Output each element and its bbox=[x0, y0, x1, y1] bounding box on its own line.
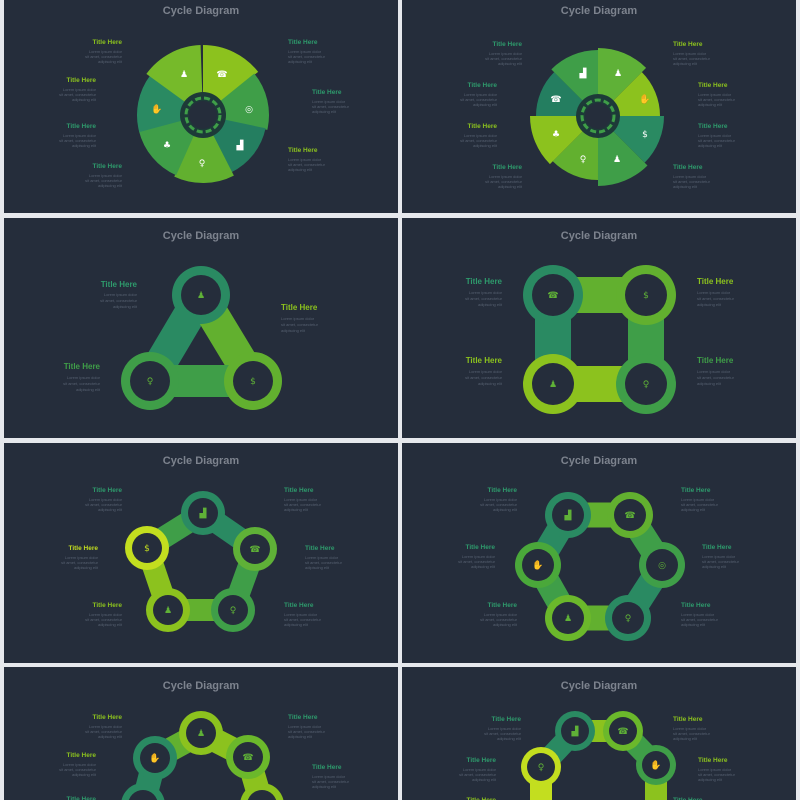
slide 1 labels: Lorem ipsum dolor bbox=[288, 49, 322, 54]
slide 2 labels: Title Here bbox=[673, 164, 703, 171]
slide 3 labels: Title Here bbox=[101, 280, 138, 289]
slide 8 labels: sit amet, consectetur bbox=[673, 731, 711, 736]
slide 3 triangle cycle bbox=[121, 266, 282, 410]
slide 1 heading: Cycle Diagram bbox=[163, 5, 239, 17]
slide 5 labels: sit amet, consectetur bbox=[305, 560, 343, 565]
slide 7 seven-node cycle (partial): ✋ bbox=[149, 752, 161, 764]
slide 4 labels: adipiscing elit bbox=[478, 302, 503, 307]
slide 5 labels: adipiscing elit bbox=[98, 507, 123, 512]
slide 5 labels: Lorem ipsum dolor bbox=[89, 497, 123, 502]
slide 5 heading: Cycle Diagram bbox=[163, 455, 239, 467]
slide 3 labels: Lorem ipsum dolor bbox=[67, 375, 101, 380]
slide 2 labels: Title Here bbox=[467, 123, 497, 130]
slide 8 labels: Title Here bbox=[491, 716, 521, 723]
slide 4 labels: Title Here bbox=[466, 356, 503, 365]
slide 4 four-node cycle: $ bbox=[643, 291, 649, 301]
slide 6 labels: Lorem ipsum dolor bbox=[462, 554, 496, 559]
slide 7 labels: Lorem ipsum dolor bbox=[63, 762, 97, 767]
slide 7 labels: adipiscing elit bbox=[312, 784, 337, 789]
slide 5 labels: adipiscing elit bbox=[98, 622, 123, 627]
slide 1 labels: adipiscing elit bbox=[288, 167, 313, 172]
slide 3 labels: sit amet, consectetur bbox=[100, 298, 138, 303]
slide 8 labels: Lorem ipsum dolor bbox=[463, 767, 497, 772]
slide 2 labels: Title Here bbox=[673, 41, 703, 48]
slide 6 labels: sit amet, consectetur bbox=[458, 559, 496, 564]
slide 1 labels: adipiscing elit bbox=[72, 97, 97, 102]
slide 6 hexagon cycle: ☎ bbox=[624, 511, 636, 521]
slide 4 four-node cycle: ♟ bbox=[549, 380, 557, 390]
slide 2 labels: sit amet, consectetur bbox=[698, 138, 736, 143]
slide 5 labels: Title Here bbox=[305, 545, 335, 552]
slide 4 labels bbox=[465, 277, 735, 386]
slide 7 labels: adipiscing elit bbox=[288, 734, 313, 739]
slide 7 labels: Title Here bbox=[66, 752, 96, 759]
slide 1 pie chart: ☎ bbox=[216, 70, 228, 80]
slide 5 background bbox=[4, 443, 398, 663]
slide 4 labels: Lorem ipsum dolor bbox=[697, 290, 731, 295]
slide 2 background bbox=[402, 0, 796, 213]
slide 7 labels: Title Here bbox=[92, 714, 122, 721]
slide 3 labels: adipiscing elit bbox=[281, 328, 306, 333]
slide 2 labels: sit amet, consectetur bbox=[485, 56, 523, 61]
slide 5 labels: Title Here bbox=[284, 602, 314, 609]
slide 6 labels: sit amet, consectetur bbox=[702, 559, 740, 564]
slide 2 pie chart: ☎ bbox=[550, 95, 562, 105]
slide 7 labels: Lorem ipsum dolor bbox=[312, 774, 346, 779]
slide 5 pentagon cycle bbox=[125, 491, 277, 632]
slide 3 labels: Lorem ipsum dolor bbox=[281, 316, 315, 321]
slide 8 labels: Lorem ipsum dolor bbox=[488, 726, 522, 731]
slide 5 labels: sit amet, consectetur bbox=[61, 560, 99, 565]
slide 1 labels: Lorem ipsum dolor bbox=[63, 87, 97, 92]
slide 5 labels bbox=[61, 487, 343, 627]
slide 1 labels: adipiscing elit bbox=[312, 109, 337, 114]
slide 4 labels: sit amet, consectetur bbox=[465, 296, 503, 301]
slide 2 labels: Title Here bbox=[467, 82, 497, 89]
slide 6 labels: adipiscing elit bbox=[681, 507, 706, 512]
slide 6 labels: sit amet, consectetur bbox=[681, 617, 719, 622]
slide 2 labels: sit amet, consectetur bbox=[673, 56, 711, 61]
slide 6 labels: Title Here bbox=[487, 487, 517, 494]
slide 4 labels: Title Here bbox=[697, 277, 734, 286]
slide 6 labels: Title Here bbox=[487, 602, 517, 609]
slide 8 labels: adipiscing elit bbox=[698, 777, 723, 782]
slide 2 labels: Lorem ipsum dolor bbox=[673, 51, 707, 56]
slide 5 labels: Title Here bbox=[284, 487, 314, 494]
slide 2 pie chart: ♀ bbox=[580, 155, 586, 165]
slide 5 labels: sit amet, consectetur bbox=[284, 617, 322, 622]
slide 6 background bbox=[402, 443, 796, 663]
slide 4 labels: sit amet, consectetur bbox=[697, 375, 735, 380]
slide 5 labels: Lorem ipsum dolor bbox=[89, 612, 123, 617]
slide 3 labels: Title Here bbox=[64, 362, 101, 371]
slide 2 labels: adipiscing elit bbox=[473, 102, 498, 107]
slide 6 labels: sit amet, consectetur bbox=[681, 502, 719, 507]
slide 2 labels: Title Here bbox=[492, 41, 522, 48]
slide 7 labels: sit amet, consectetur bbox=[85, 729, 123, 734]
slide 5 labels: Title Here bbox=[92, 487, 122, 494]
slide 3 triangle cycle: ♟ bbox=[197, 291, 205, 301]
slide 2 heading: Cycle Diagram bbox=[561, 5, 637, 17]
slide 7 labels: sit amet, consectetur bbox=[312, 779, 350, 784]
slide 7 labels: adipiscing elit bbox=[72, 772, 97, 777]
slide 8 heading: Cycle Diagram bbox=[561, 680, 637, 692]
slide 8 labels: sit amet, consectetur bbox=[484, 731, 522, 736]
slide 2 labels: Lorem ipsum dolor bbox=[698, 133, 732, 138]
slide 2 labels: Lorem ipsum dolor bbox=[698, 92, 732, 97]
slide 6 hexagon cycle: ◎ bbox=[658, 561, 666, 571]
slide 1 labels: Title Here bbox=[66, 77, 96, 84]
slide 3 triangle cycle: ♀ bbox=[147, 377, 153, 387]
slide 2 labels: Title Here bbox=[698, 82, 728, 89]
slide 6 hexagon cycle: ♟ bbox=[564, 614, 572, 624]
slide 1 labels: Lorem ipsum dolor bbox=[89, 49, 123, 54]
slide 6 labels: Lorem ipsum dolor bbox=[702, 554, 736, 559]
slide 1 labels: adipiscing elit bbox=[288, 59, 313, 64]
slide 5 pentagon cycle: ▟ bbox=[199, 507, 208, 519]
slide 4 heading: Cycle Diagram bbox=[561, 230, 637, 242]
slide 5 labels: adipiscing elit bbox=[305, 565, 330, 570]
slide 1 labels: sit amet, consectetur bbox=[59, 138, 97, 143]
slide 8 labels: Title Here bbox=[673, 716, 703, 723]
slide 7 labels: sit amet, consectetur bbox=[59, 767, 97, 772]
slide 2 pie chart: ♟ bbox=[614, 69, 622, 79]
slide 4 background bbox=[402, 218, 796, 438]
slide 3 labels: Title Here bbox=[281, 303, 318, 312]
slide 7 heading: Cycle Diagram bbox=[163, 680, 239, 692]
slide 8 labels bbox=[459, 716, 736, 800]
slide 1 labels: sit amet, consectetur bbox=[59, 92, 97, 97]
slide 7 seven-node cycle (partial): ☎ bbox=[242, 753, 254, 763]
slide 7 labels bbox=[59, 714, 350, 800]
slide 1 labels: Title Here bbox=[92, 163, 122, 170]
slide 5 labels: adipiscing elit bbox=[74, 565, 99, 570]
slide 5 labels: Title Here bbox=[92, 602, 122, 609]
slide 5 labels: Lorem ipsum dolor bbox=[284, 497, 318, 502]
slide 2 labels: sit amet, consectetur bbox=[460, 97, 498, 102]
slide 4 labels: Lorem ipsum dolor bbox=[469, 369, 503, 374]
slide 2 labels: adipiscing elit bbox=[498, 61, 523, 66]
slide 1 pie chart: ♣ bbox=[163, 141, 171, 151]
slide 1 labels: sit amet, consectetur bbox=[85, 54, 123, 59]
slide 1 pie chart: ♟ bbox=[180, 70, 188, 80]
slide 2 labels bbox=[460, 41, 736, 189]
slide 7 labels: Title Here bbox=[312, 764, 342, 771]
slide 5 labels: Lorem ipsum dolor bbox=[305, 555, 339, 560]
slide 1 labels: Title Here bbox=[288, 147, 318, 154]
slide 1 labels: sit amet, consectetur bbox=[85, 178, 123, 183]
slide 8 labels: adipiscing elit bbox=[497, 736, 522, 741]
slide 3 labels: adipiscing elit bbox=[113, 304, 138, 309]
slide 1 labels: Title Here bbox=[288, 39, 318, 46]
slide 5 labels: sit amet, consectetur bbox=[85, 617, 123, 622]
slide 6 heading: Cycle Diagram bbox=[561, 455, 637, 467]
slide 1 labels: Title Here bbox=[92, 39, 122, 46]
slide 4 labels: Title Here bbox=[697, 356, 734, 365]
slide 5 pentagon cycle: $ bbox=[144, 544, 150, 554]
slide 6 labels: Lorem ipsum dolor bbox=[484, 612, 518, 617]
slide 3 triangle cycle: $ bbox=[250, 377, 256, 387]
slide 4 labels: Title Here bbox=[466, 277, 503, 286]
slide 8 labels: adipiscing elit bbox=[673, 736, 698, 741]
slide 2 pie chart: ♣ bbox=[552, 130, 560, 140]
slide 2 labels: sit amet, consectetur bbox=[673, 179, 711, 184]
slide 7 labels: Title Here bbox=[288, 714, 318, 721]
slide 2 labels: Lorem ipsum dolor bbox=[489, 174, 523, 179]
slide 2 labels: adipiscing elit bbox=[473, 143, 498, 148]
slide 6 labels: adipiscing elit bbox=[702, 564, 727, 569]
slide 5 pentagon cycle: ♀ bbox=[230, 606, 236, 616]
slide 8 eight-node cycle (partial): ♀ bbox=[538, 763, 544, 773]
slide 8 labels: Lorem ipsum dolor bbox=[673, 726, 707, 731]
slide 1 labels: Lorem ipsum dolor bbox=[63, 133, 97, 138]
slide 1 pie chart bbox=[151, 66, 253, 169]
slide 8 eight-node cycle (partial): ✋ bbox=[650, 759, 662, 771]
slide 1 labels: adipiscing elit bbox=[98, 183, 123, 188]
slide 6 labels: Title Here bbox=[681, 602, 711, 609]
slide 8 labels: sit amet, consectetur bbox=[459, 772, 497, 777]
slide 5 labels: Lorem ipsum dolor bbox=[65, 555, 99, 560]
slide 2 labels: Lorem ipsum dolor bbox=[464, 133, 498, 138]
slide 1 labels: Title Here bbox=[66, 123, 96, 130]
slide 4 four-node cycle: ☎ bbox=[547, 291, 559, 301]
slide 4 four-node cycle bbox=[523, 265, 676, 414]
slide 5 labels: adipiscing elit bbox=[284, 507, 309, 512]
slide 7 labels: Lorem ipsum dolor bbox=[89, 724, 123, 729]
slide 6 hexagon cycle: ♀ bbox=[625, 614, 631, 624]
slide 6 labels: Lorem ipsum dolor bbox=[681, 612, 715, 617]
slide 6 labels: adipiscing elit bbox=[493, 507, 518, 512]
slide 1 pie chart: ◎ bbox=[245, 105, 253, 115]
slide 1 labels: sit amet, consectetur bbox=[312, 104, 350, 109]
slide 3 labels bbox=[63, 280, 319, 392]
slide 8 labels: Title Here bbox=[466, 757, 496, 764]
slide 6 labels: Lorem ipsum dolor bbox=[484, 497, 518, 502]
slide 2 pie chart: $ bbox=[642, 130, 648, 140]
slide 5 labels: sit amet, consectetur bbox=[85, 502, 123, 507]
slide 8 labels: adipiscing elit bbox=[472, 777, 497, 782]
slide 7 labels: adipiscing elit bbox=[98, 734, 123, 739]
slide 1 pie chart: ✋ bbox=[151, 103, 163, 115]
slide 1 pie chart: ▟ bbox=[236, 139, 245, 151]
slide 2 labels: sit amet, consectetur bbox=[485, 179, 523, 184]
slide 5 pentagon cycle: ☎ bbox=[249, 545, 261, 555]
slide 8 labels: Title Here bbox=[698, 757, 728, 764]
slide 8 eight-node cycle (partial): ☎ bbox=[617, 727, 629, 737]
slide 3 labels: sit amet, consectetur bbox=[281, 322, 319, 327]
slide 7 seven-node cycle (partial): ♟ bbox=[197, 729, 205, 739]
slide 6 labels: adipiscing elit bbox=[681, 622, 706, 627]
slide 2 labels: adipiscing elit bbox=[673, 184, 698, 189]
slide 3 labels: adipiscing elit bbox=[76, 387, 101, 392]
slide 1 labels: adipiscing elit bbox=[72, 143, 97, 148]
slide 8 labels: Lorem ipsum dolor bbox=[698, 767, 732, 772]
slide 4 labels: adipiscing elit bbox=[697, 381, 722, 386]
slide 6 labels: sit amet, consectetur bbox=[480, 617, 518, 622]
slide 2 pie chart: ♟ bbox=[613, 155, 621, 165]
slide 2 labels: Lorem ipsum dolor bbox=[673, 174, 707, 179]
slide 6 labels: adipiscing elit bbox=[471, 564, 496, 569]
slide 7 background bbox=[4, 667, 398, 800]
slide 5 labels: Title Here bbox=[68, 545, 98, 552]
slide 2 labels: Title Here bbox=[698, 123, 728, 130]
slide 5 pentagon cycle: ♟ bbox=[164, 606, 172, 616]
slide 1 labels: adipiscing elit bbox=[98, 59, 123, 64]
slide 1 labels bbox=[59, 39, 350, 188]
slide 8 eight-node cycle (partial) bbox=[521, 711, 676, 800]
slide 7 labels: Lorem ipsum dolor bbox=[288, 724, 322, 729]
slide 1 labels: Lorem ipsum dolor bbox=[312, 99, 346, 104]
slide 2 labels: sit amet, consectetur bbox=[460, 138, 498, 143]
slide 2 labels: adipiscing elit bbox=[498, 184, 523, 189]
slide 2 labels: adipiscing elit bbox=[698, 102, 723, 107]
slide 4 labels: adipiscing elit bbox=[478, 381, 503, 386]
slide 6 labels: Lorem ipsum dolor bbox=[681, 497, 715, 502]
slide 2 labels: Title Here bbox=[492, 164, 522, 171]
slide 5 labels: adipiscing elit bbox=[284, 622, 309, 627]
slide 1 background bbox=[4, 0, 398, 213]
slide 1 labels: Lorem ipsum dolor bbox=[288, 157, 322, 162]
slide 6 labels: sit amet, consectetur bbox=[480, 502, 518, 507]
slide 6 labels: adipiscing elit bbox=[493, 622, 518, 627]
slide 2 pie chart bbox=[549, 67, 651, 165]
slide 2 labels: adipiscing elit bbox=[673, 61, 698, 66]
slide 6 labels: Title Here bbox=[465, 544, 495, 551]
slide 8 background bbox=[402, 667, 796, 800]
slide 4 labels: Lorem ipsum dolor bbox=[469, 290, 503, 295]
slide 7 labels: sit amet, consectetur bbox=[288, 729, 326, 734]
slide 1 labels: Title Here bbox=[312, 89, 342, 96]
slide 2 pie chart: ✋ bbox=[639, 93, 651, 105]
slide 7 seven-node cycle (partial) bbox=[121, 711, 284, 800]
slide 5 labels: Lorem ipsum dolor bbox=[284, 612, 318, 617]
slide 8 eight-node cycle (partial): ▟ bbox=[571, 725, 580, 737]
slide 3 heading: Cycle Diagram bbox=[163, 230, 239, 242]
slide 5 labels: sit amet, consectetur bbox=[284, 502, 322, 507]
slide 6 hexagon cycle: ▟ bbox=[564, 509, 573, 521]
slide 1 labels: sit amet, consectetur bbox=[288, 162, 326, 167]
slide 2 pie chart: ▟ bbox=[579, 67, 588, 79]
slide 4 labels: sit amet, consectetur bbox=[697, 296, 735, 301]
slide 8 labels: sit amet, consectetur bbox=[698, 772, 736, 777]
slide 6 hexagon cycle bbox=[515, 492, 685, 641]
slide 2 labels: sit amet, consectetur bbox=[698, 97, 736, 102]
slide 1 labels: Lorem ipsum dolor bbox=[89, 173, 123, 178]
slide 6 labels bbox=[458, 487, 740, 627]
slide 6 labels: Title Here bbox=[702, 544, 732, 551]
slide 4 labels: adipiscing elit bbox=[697, 302, 722, 307]
slide 3 labels: Lorem ipsum dolor bbox=[104, 292, 138, 297]
slide 1 labels: sit amet, consectetur bbox=[288, 54, 326, 59]
slide 3 background bbox=[4, 218, 398, 438]
slide 1 pie chart: ♀ bbox=[199, 159, 205, 169]
slide 6 hexagon cycle: ✋ bbox=[532, 559, 544, 571]
slide 2 labels: Lorem ipsum dolor bbox=[489, 51, 523, 56]
slide 4 labels: sit amet, consectetur bbox=[465, 375, 503, 380]
slide 2 labels: Lorem ipsum dolor bbox=[464, 92, 498, 97]
slide 4 four-node cycle: ♀ bbox=[643, 380, 649, 390]
slide 3 labels: sit amet, consectetur bbox=[63, 381, 101, 386]
slide 4 labels: Lorem ipsum dolor bbox=[697, 369, 731, 374]
slide 6 labels: Title Here bbox=[681, 487, 711, 494]
slide 2 labels: adipiscing elit bbox=[698, 143, 723, 148]
